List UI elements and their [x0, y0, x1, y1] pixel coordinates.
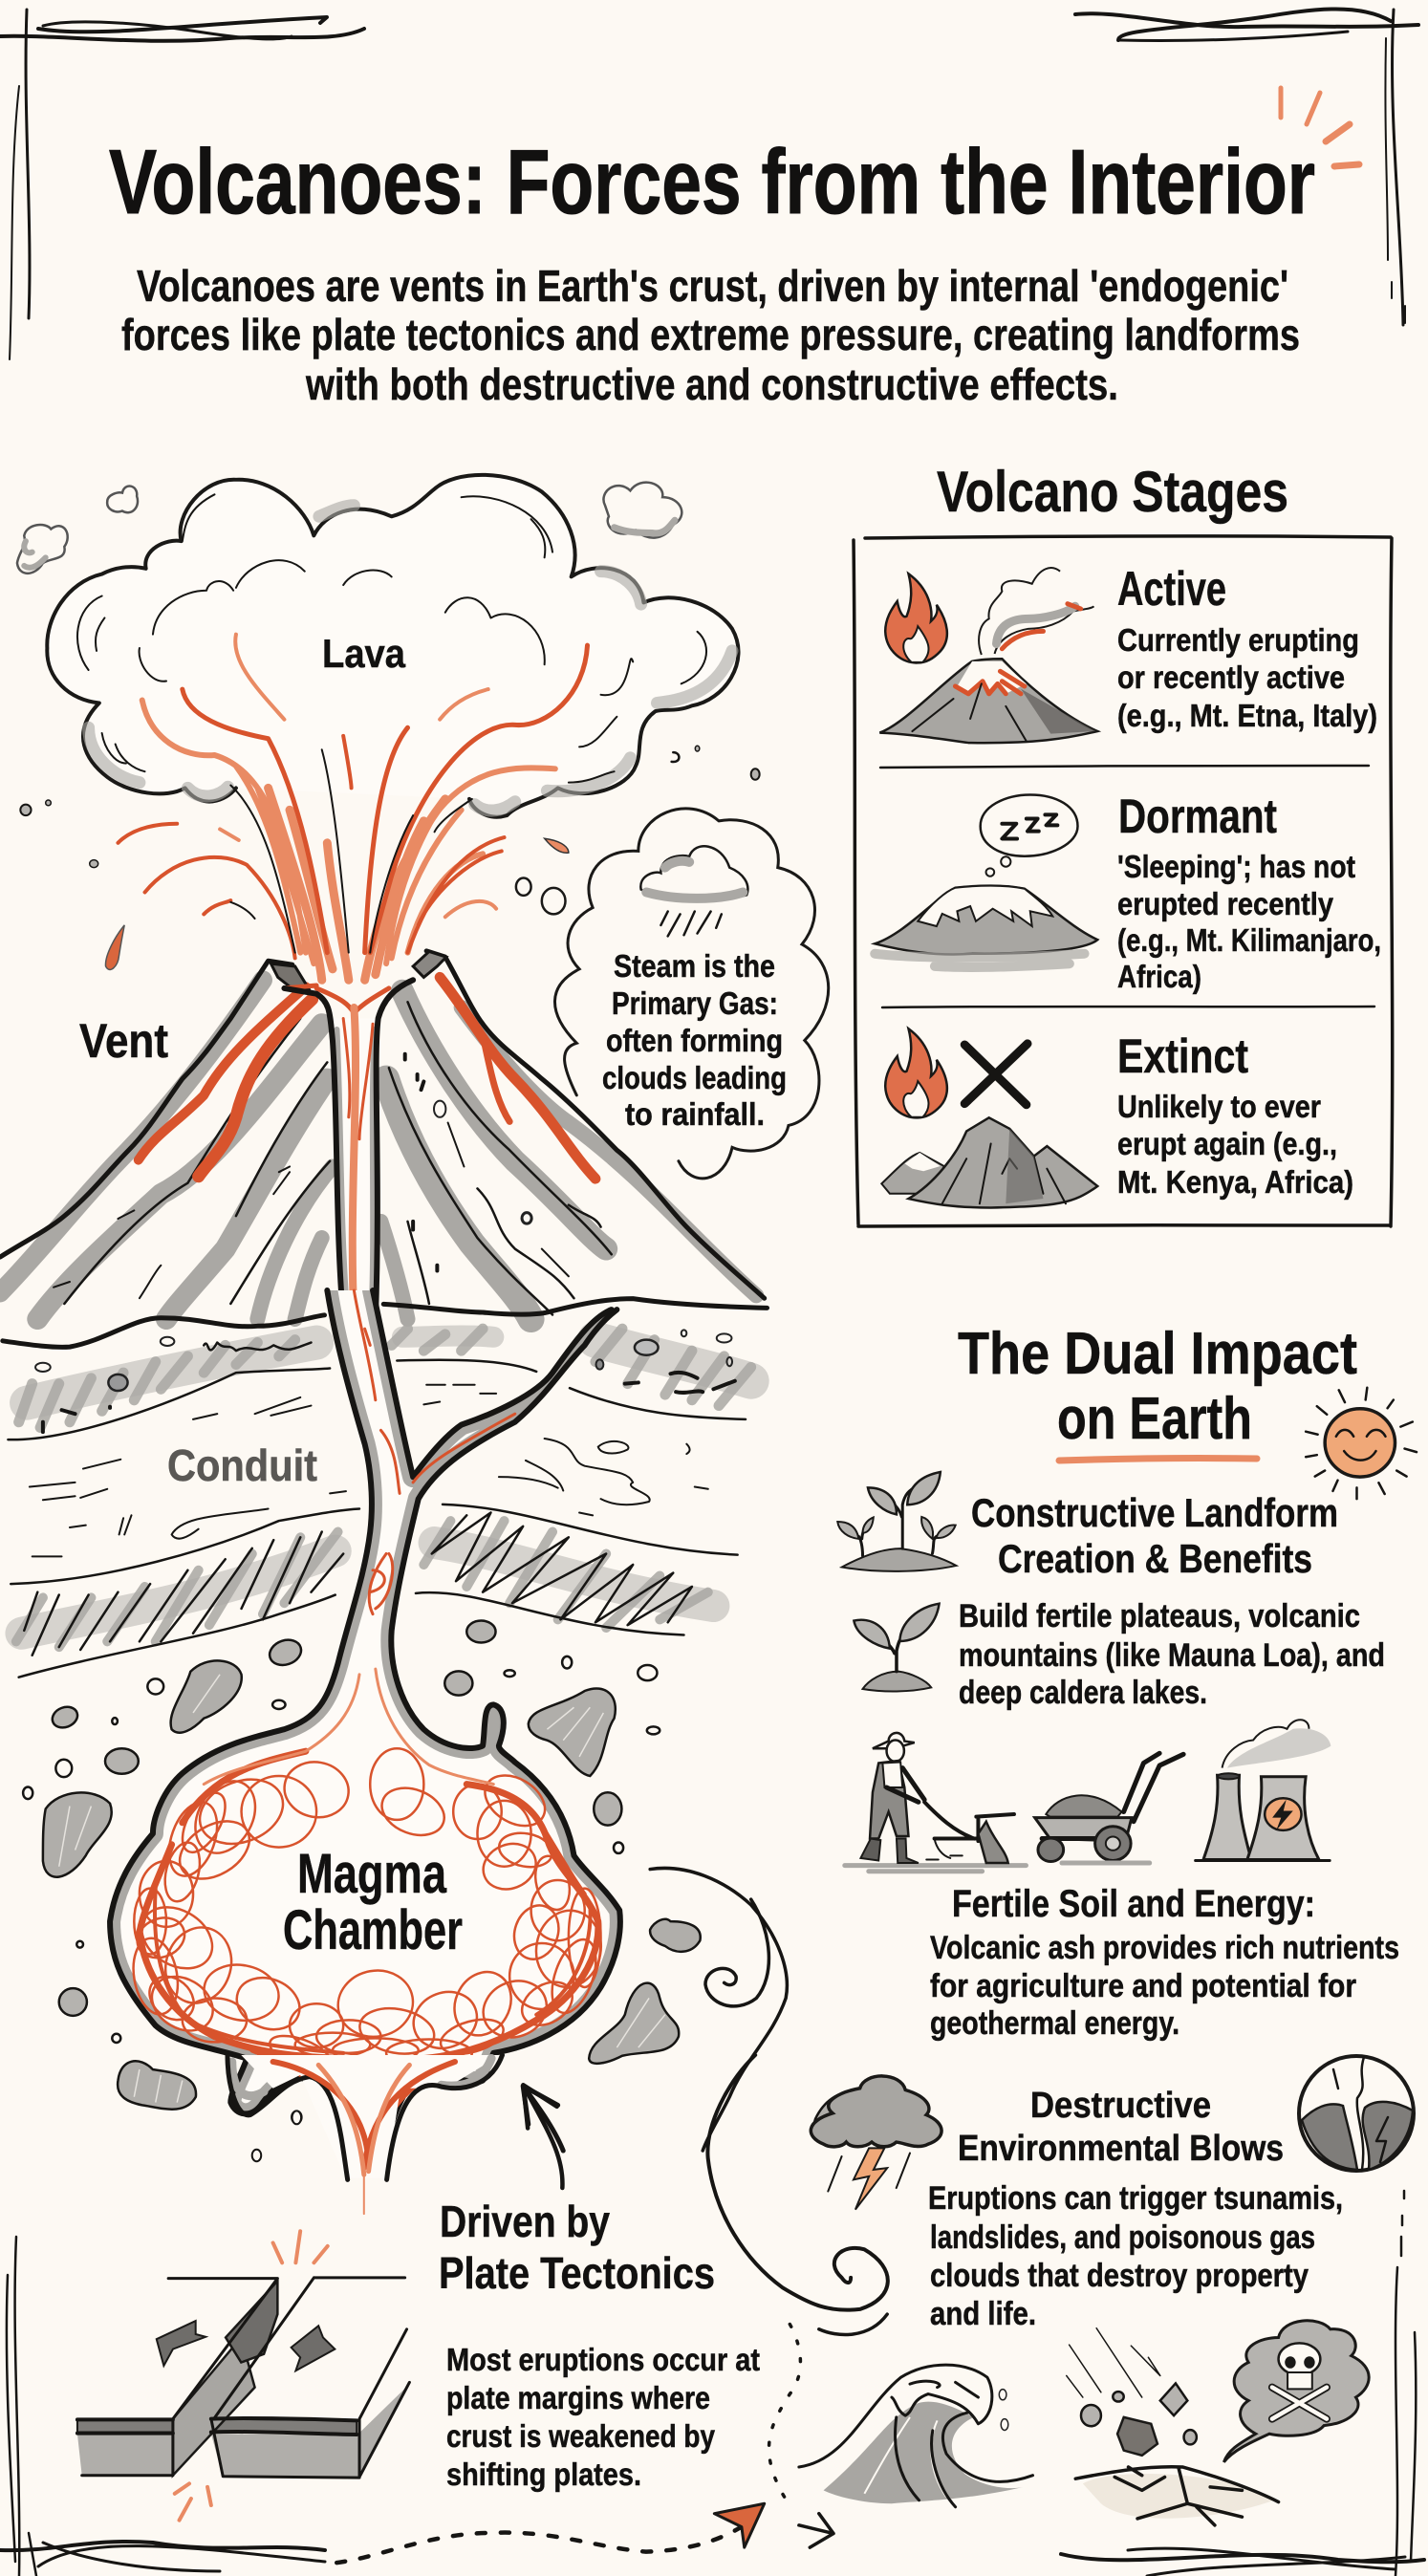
arrow: right pointing hook — [799, 2514, 833, 2547]
label: magma chamber — [283, 1843, 463, 1961]
fertile soil and energy text: for agriculture and potential for — [930, 1968, 1356, 2004]
icon: storm cloud — [811, 2076, 941, 2210]
stage: extinct — [1117, 1029, 1353, 1200]
icon: sleeping volcano with zzz bubble — [875, 794, 1097, 967]
tectonics body text: plate margins where — [446, 2380, 710, 2415]
border scribble: top right — [1075, 9, 1418, 325]
stage: active — [1117, 562, 1377, 733]
heading: driven by plate tectonics: Plate Tectonics — [439, 2248, 715, 2298]
panel: plate tectonics — [77, 2197, 760, 2521]
steam text — [602, 948, 787, 1132]
decorative orange sparks near title — [1281, 88, 1359, 166]
fertile soil and energy text: Fertile Soil and Energy: — [952, 1883, 1315, 1925]
dashed path — [769, 2325, 800, 2497]
icon: falling rocks and cracked ground — [1067, 2328, 1279, 2525]
heading: driven by plate tectonics: Driven by — [440, 2197, 610, 2246]
stage: active: Active — [1117, 562, 1226, 616]
steam text: often forming — [606, 1023, 783, 1058]
label: magma chamber: Magma — [297, 1843, 447, 1905]
subheading: constructive landform — [971, 1490, 1338, 1581]
icon: tsunami wave — [799, 2365, 1033, 2507]
destructive body text — [928, 2180, 1343, 2332]
stage: active: (e.g., Mt. Etna, Italy) — [1117, 698, 1377, 733]
heading: volcano stages: Volcano Stages — [937, 460, 1288, 524]
right margin dashes — [1401, 2191, 1404, 2256]
icon: extinct flame with cross — [885, 1028, 1028, 1117]
lava fountain — [105, 635, 588, 980]
dashed curve — [336, 2527, 742, 2563]
stage: dormant: (e.g., Mt. Kilimanjaro, — [1117, 922, 1381, 958]
stage: active: Currently erupting — [1117, 622, 1359, 658]
stage: extinct: erupt again (e.g., — [1117, 1126, 1337, 1161]
intro text: with both destructive and constructive effects. — [305, 359, 1118, 409]
orange arrow head — [714, 2503, 765, 2547]
stages frame — [854, 536, 1393, 1226]
rock strata hatching — [8, 1329, 751, 1678]
label: lava: Lava — [322, 631, 406, 676]
volcano cone — [0, 951, 765, 1319]
volcano main diagram — [0, 475, 888, 2335]
fertile soil and energy text: geothermal energy. — [930, 2005, 1179, 2042]
steam text: Primary Gas: — [612, 985, 778, 1021]
tectonics body text: shifting plates. — [446, 2457, 641, 2492]
subheading: constructive landform: Creation & Benefits — [998, 1536, 1312, 1581]
subheading: destructive environmental blows — [958, 2086, 1284, 2169]
ash specks — [20, 746, 760, 868]
icon: poison gas cloud with skull — [1223, 2321, 1369, 2462]
dashed arrow from tectonics to hazards — [336, 2503, 765, 2563]
border scribble: bottom left — [0, 2237, 325, 2576]
icon: plate boundary block diagram — [77, 2231, 409, 2521]
thought cloud outline — [554, 809, 829, 1179]
steam text: to rainfall. — [625, 1096, 765, 1132]
panel: volcano stages — [854, 460, 1393, 1226]
small drifting clouds — [17, 483, 682, 574]
conduit branch and magma chamber — [110, 1290, 620, 2151]
stage: dormant: erupted recently — [1117, 886, 1334, 921]
icon: farmer ploughing — [845, 1733, 1026, 1872]
stage: active: or recently active — [1117, 660, 1345, 695]
underground section — [3, 1290, 841, 2151]
stage: dormant: 'Sleeping'; has not — [1117, 849, 1355, 884]
intro text — [121, 261, 1300, 409]
steam text: Steam is the — [614, 948, 775, 984]
tectonics body text: Most eruptions occur at — [446, 2342, 760, 2377]
heading: the dual impact on earth: on Earth — [1057, 1386, 1252, 1452]
label: magma chamber: Chamber — [283, 1899, 463, 1961]
subheading: destructive environmental blows: Environmental Blows — [958, 2129, 1284, 2169]
heading: the dual impact on earth — [958, 1321, 1357, 1461]
magma scribbles — [128, 1669, 607, 2151]
icon: single sprout — [854, 1604, 940, 1691]
tectonics body text: crust is weakened by — [446, 2418, 716, 2454]
constructive body text — [959, 1598, 1385, 1711]
thought bubbles cloud icon — [640, 846, 747, 936]
destructive body text: clouds that destroy property — [930, 2258, 1309, 2294]
chamber tail — [227, 2055, 888, 2335]
stage: extinct: Extinct — [1117, 1029, 1248, 1083]
label: vent: Vent — [79, 1014, 168, 1068]
heading: the dual impact on earth: The Dual Impact — [958, 1321, 1357, 1387]
stage: dormant: Africa) — [1117, 959, 1201, 994]
icon: three sprouts — [837, 1472, 957, 1571]
panel: dual impact — [336, 1321, 1417, 2563]
constructive body text: deep caldera lakes. — [959, 1675, 1207, 1711]
subheading: destructive environmental blows: Destructive — [1030, 2086, 1211, 2126]
stage: dormant — [1117, 790, 1381, 994]
volcano eruption and cone — [0, 475, 765, 1319]
destructive body text: Eruptions can trigger tsunamis, — [928, 2180, 1343, 2217]
stage: extinct: Unlikely to ever — [1117, 1089, 1321, 1124]
callout: steam thought cloud — [554, 809, 829, 1179]
eruption cloud — [47, 475, 739, 817]
heading: driven by plate tectonics — [439, 2197, 715, 2298]
ground surface line — [3, 1299, 768, 1347]
icon: erupting volcano — [879, 568, 1097, 743]
stage: dormant: Dormant — [1118, 790, 1277, 843]
label: conduit: Conduit — [167, 1440, 317, 1490]
fertile soil and energy text — [930, 1883, 1399, 2042]
border scribble: top left — [0, 10, 364, 359]
icon: extinct mountains — [881, 1117, 1097, 1207]
arrow toward chamber — [523, 2086, 563, 2151]
icon: flame active — [885, 574, 947, 662]
border scribble: bottom right — [1061, 2267, 1424, 2576]
small spiral — [705, 1899, 768, 2006]
steam text: clouds leading — [602, 1060, 787, 1095]
icon: geothermal cooling towers — [1196, 1720, 1331, 1860]
swirl line from chamber — [650, 1868, 787, 2151]
tectonics body text — [446, 2342, 760, 2492]
blob rocks around the chamber — [23, 1621, 841, 2144]
stage: extinct: Mt. Kenya, Africa) — [1117, 1164, 1353, 1200]
icon: wheelbarrow of soil — [1035, 1753, 1183, 1863]
icon: cracked earth globe — [1299, 2056, 1414, 2171]
destructive body text: landslides, and poisonous gas — [930, 2219, 1315, 2256]
upper conduit walls in the cone — [284, 980, 413, 1319]
subheading: constructive landform: Constructive Landform — [971, 1490, 1338, 1535]
destructive body text: and life. — [930, 2296, 1036, 2332]
constructive body text: Build fertile plateaus, volcanic — [959, 1598, 1360, 1634]
icon: smiling sun — [1306, 1388, 1417, 1499]
